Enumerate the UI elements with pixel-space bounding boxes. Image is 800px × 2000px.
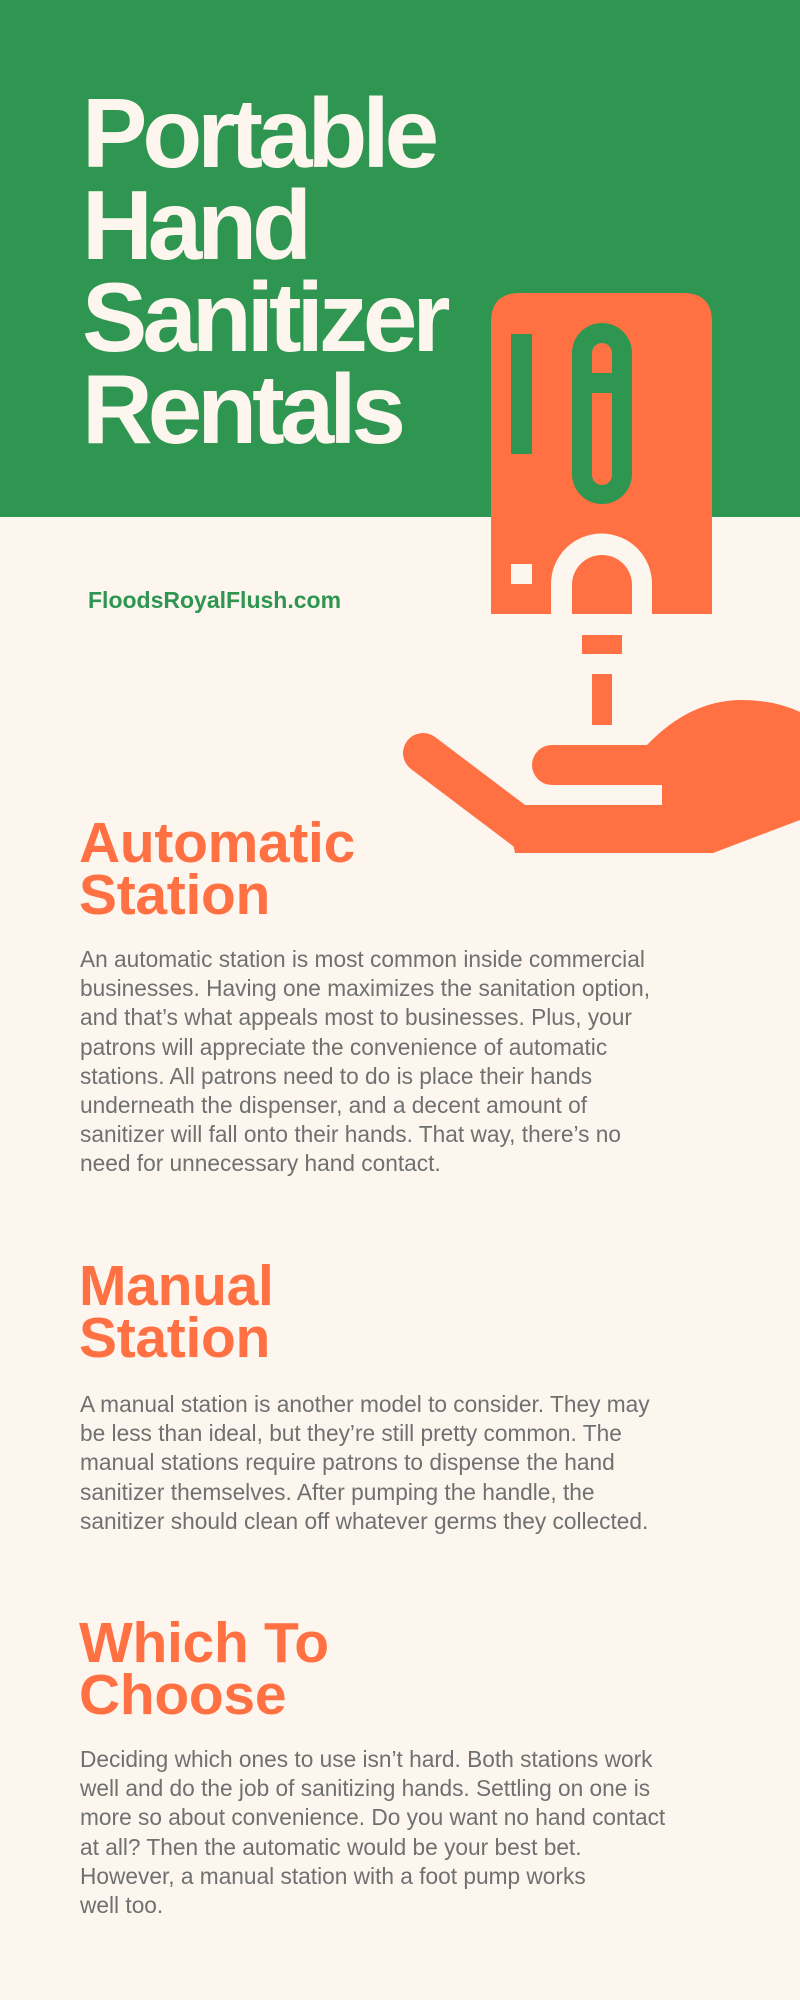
text: automatic station: stations. All patrons need to do is place their hands xyxy=(80,1063,592,1089)
text: automatic station: sanitizer will fall onto their hands. That way, there’s no xyxy=(80,1121,621,1147)
heading: automatic station xyxy=(79,811,355,927)
text: which to choose: However, a manual station with a foot pump works xyxy=(80,1863,586,1889)
text: automatic station xyxy=(80,946,650,1176)
title: Hand xyxy=(82,170,307,280)
heading: which to choose: Choose xyxy=(79,1663,286,1727)
text: automatic station: An automatic station is most common inside commercial xyxy=(80,946,645,972)
text: manual station: manual stations require patrons to dispense the hand xyxy=(80,1449,615,1475)
text: automatic station: businesses. Having one maximizes the sanitation option, xyxy=(80,975,650,1001)
text: which to choose: well and do the job of sanitizing hands. Settling on one is xyxy=(80,1775,650,1801)
text: automatic station: need for unnecessary hand contact. xyxy=(80,1150,441,1176)
text: manual station xyxy=(80,1391,650,1534)
icon: sanitizer dispenser and hand xyxy=(403,293,800,853)
text: manual station: sanitizer themselves. After pumping the handle, the xyxy=(80,1479,595,1505)
title xyxy=(82,78,450,464)
hand xyxy=(423,753,525,830)
title: Rentals xyxy=(82,354,401,464)
drops xyxy=(582,635,622,654)
text: automatic station: and that’s what appeals most to businesses. Plus, your xyxy=(80,1004,632,1030)
text: which to choose: at all? Then the automatic would be your best bet. xyxy=(80,1834,582,1860)
text: manual station: sanitizer should clean off whatever germs they collected. xyxy=(80,1508,648,1534)
heading: which to choose: Which To xyxy=(79,1611,329,1675)
title: Portable xyxy=(82,78,434,188)
text: which to choose: more so about convenience. Do you want no hand contact xyxy=(80,1804,665,1830)
header band xyxy=(0,0,800,517)
text: automatic station: patrons will appreciate the convenience of automatic xyxy=(80,1034,607,1060)
text: automatic station: underneath the dispenser, and a decent amount of xyxy=(80,1092,587,1118)
heading: which to choose xyxy=(79,1611,329,1727)
text: manual station: A manual station is another model to consider. They may xyxy=(80,1391,650,1417)
heading: automatic station: Station xyxy=(79,863,270,927)
dispenser body xyxy=(491,293,712,614)
text: which to choose: Deciding which ones to use isn’t hard. Both stations work xyxy=(80,1746,653,1772)
text: manual station: be less than ideal, but they’re still pretty common. The xyxy=(80,1420,622,1446)
heading: manual station xyxy=(79,1254,274,1370)
heading: manual station: Manual xyxy=(79,1254,274,1318)
website: FloodsRoyalFlush.com xyxy=(88,587,341,613)
title: Sanitizer xyxy=(82,262,445,372)
heading: manual station: Station xyxy=(79,1306,270,1370)
text: which to choose: well too. xyxy=(80,1892,163,1918)
heading: automatic station: Automatic xyxy=(79,811,355,875)
text: which to choose xyxy=(80,1746,665,1918)
